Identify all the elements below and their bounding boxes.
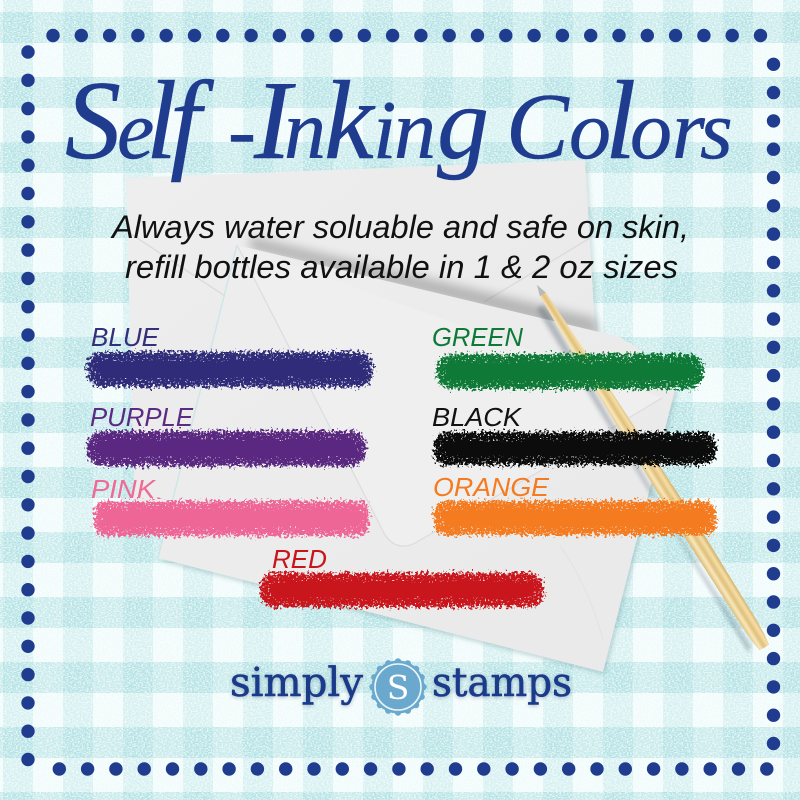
swatch: pink — [91, 474, 369, 536]
icon: scalloped S badge — [372, 660, 424, 714]
swatch: green: GREEN — [432, 322, 523, 352]
swatch: pink: PINK — [91, 474, 157, 504]
swatch: orange — [433, 472, 716, 535]
title: C — [506, 75, 570, 179]
swatch: green — [432, 322, 703, 389]
front envelope — [158, 245, 675, 672]
title: l — [605, 59, 636, 183]
logo wordmark: stamps — [432, 660, 572, 706]
icon: scalloped S badge: S — [387, 668, 409, 707]
swatch: blue — [87, 322, 373, 387]
envelopes — [126, 160, 677, 675]
front envelope shadow — [160, 236, 677, 675]
logo wordmark: stamps — [432, 661, 572, 707]
title: I — [253, 59, 296, 183]
subtitle: refill bottles available in 1 & 2 oz sizes — [125, 249, 678, 285]
title: - — [228, 84, 256, 177]
logo wordmark — [230, 660, 572, 707]
title: i — [373, 84, 396, 177]
swatch: black: BLACK — [432, 402, 523, 432]
title: S — [65, 59, 121, 183]
title: s — [700, 84, 733, 177]
subtitle: Always water soluable and safe on skin, — [110, 209, 689, 245]
title: f — [170, 59, 215, 183]
swatch: red — [260, 544, 543, 607]
swatch: orange: ORANGE — [433, 472, 550, 502]
icon: gold pen — [523, 280, 772, 656]
title: n — [394, 84, 436, 177]
simply stamps logo — [230, 660, 572, 714]
title: l — [146, 59, 177, 183]
swatch: red: RED — [272, 544, 327, 574]
title: o — [569, 84, 611, 177]
title: r — [672, 84, 705, 177]
subtitle — [110, 209, 689, 285]
swatch: black — [432, 402, 716, 465]
title: g — [437, 66, 515, 181]
title: k — [324, 59, 376, 183]
back envelope — [126, 160, 599, 527]
logo wordmark: simply — [230, 660, 363, 706]
swatch: blue: BLUE — [91, 322, 160, 352]
swatch: purple: PURPLE — [90, 402, 194, 432]
logo wordmark: simply — [230, 661, 363, 707]
swatch: purple — [87, 402, 366, 466]
title: n — [284, 84, 326, 177]
title: o — [630, 84, 672, 177]
title: e — [117, 84, 154, 177]
